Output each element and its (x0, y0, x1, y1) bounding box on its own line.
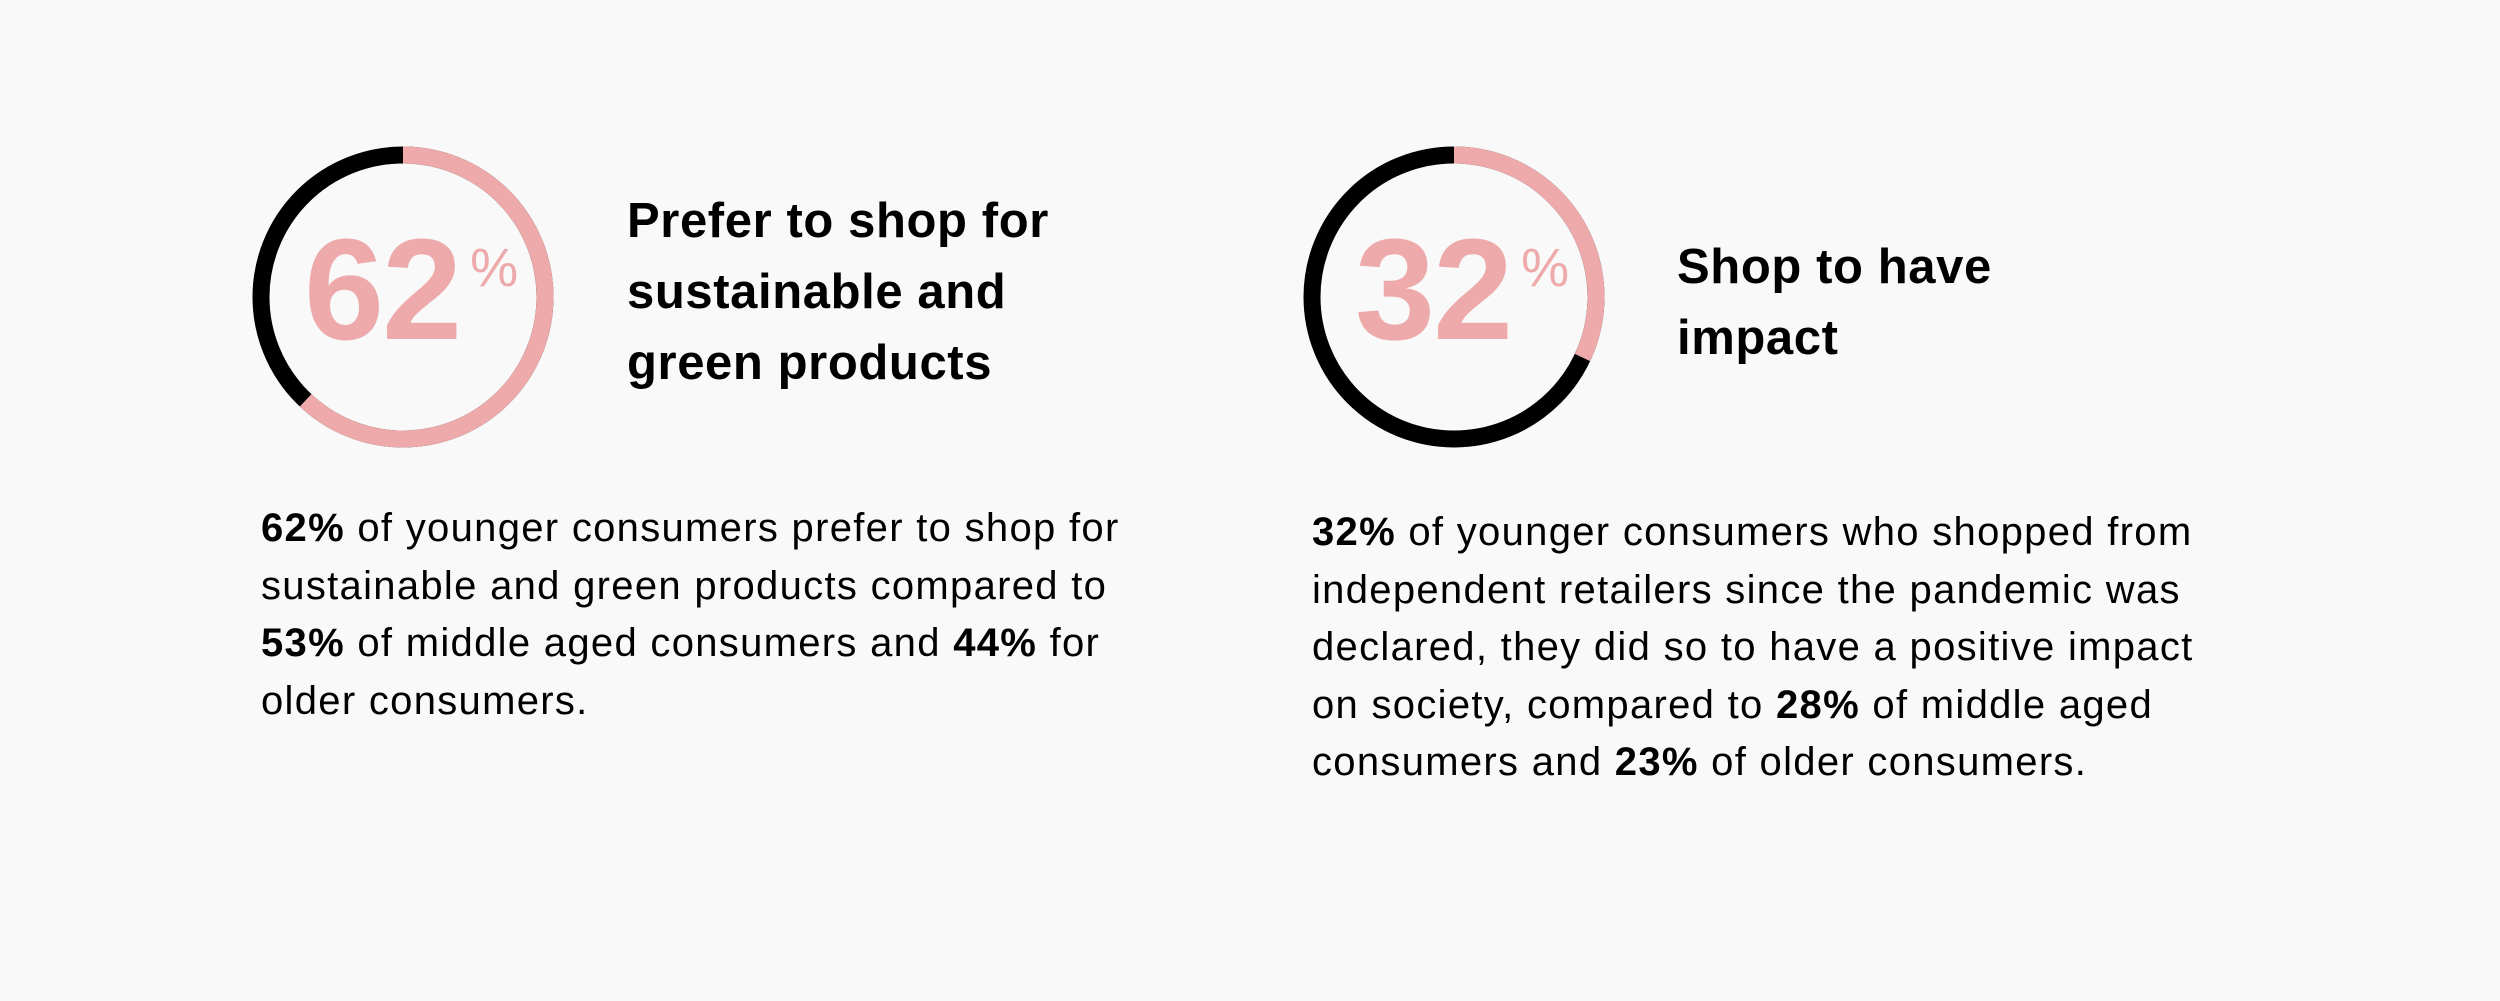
body text: declared, they did so to have a positive impact (1312, 625, 2194, 669)
body text (1312, 510, 2194, 784)
heading: sustainable and (627, 265, 1006, 319)
donut chart: 32% (1304, 146, 1604, 448)
donut chart: 62% (252, 146, 554, 448)
body text: 53% of middle aged consumers and 44% for (261, 621, 1100, 665)
big number 62%: 62% (304, 209, 518, 370)
heading: Shop to have (1677, 240, 1992, 294)
panel: sustainable products (252, 146, 1120, 722)
body text: sustainable and green products compared to (261, 564, 1107, 608)
body text: consumers and 23% of older consumers. (1312, 740, 2087, 784)
panel: shop to have impact (1304, 146, 2194, 784)
body text: 62% of younger consumers prefer to shop for (261, 506, 1120, 550)
body text: 32% of younger consumers who shopped from (1312, 510, 2192, 554)
heading: green products (627, 336, 992, 390)
body text: independent retailers since the pandemic was (1312, 568, 2181, 612)
heading (627, 194, 1049, 390)
heading: Prefer to shop for (627, 194, 1049, 248)
big number 32%: 32% (1355, 209, 1569, 370)
body text (261, 506, 1120, 722)
body text: older consumers. (261, 678, 589, 722)
heading (1677, 240, 1992, 365)
body text: on society, compared to 28% of middle aged (1312, 682, 2153, 726)
heading: impact (1677, 311, 1839, 365)
